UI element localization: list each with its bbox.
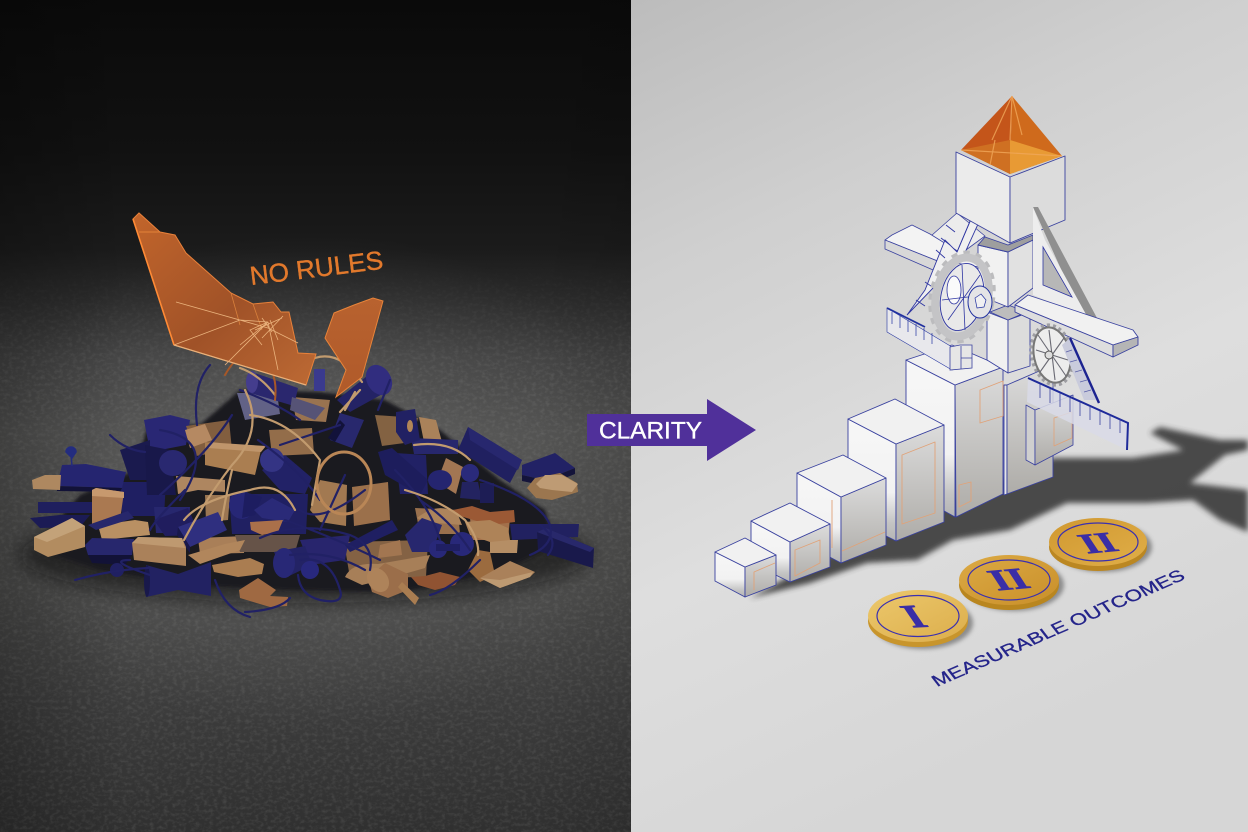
- coin II: II: [981, 561, 1037, 597]
- wood leaning tile: [437, 458, 463, 494]
- illustration: chaotic pile of pieces: [30, 353, 594, 617]
- navy bar right centre: [378, 448, 428, 495]
- right crossbar: [1015, 295, 1138, 357]
- small navy tab: [314, 369, 325, 391]
- middle tower cube: [978, 235, 1033, 307]
- wood block centre: [205, 442, 266, 475]
- edge vignette: [0, 0, 631, 832]
- wood upright block left: [92, 488, 124, 527]
- navy and tan cords: [75, 353, 552, 617]
- navy small ball bottom left: [110, 563, 124, 577]
- wood round shape right: [527, 473, 578, 500]
- wood flat lower centre: [212, 558, 264, 577]
- arrow shape: [587, 399, 756, 461]
- wood plank: [188, 540, 245, 564]
- navy flat block right: [522, 453, 575, 486]
- outcome coins: [868, 518, 1152, 649]
- navy bow-tie spool: [144, 562, 211, 597]
- light background: [631, 0, 1248, 832]
- panel: no rules (dark side): [0, 0, 631, 832]
- navy wedge centre left: [154, 508, 200, 536]
- left stepped set square: [907, 186, 989, 315]
- upper crossbar left: [885, 213, 985, 273]
- navy short column: [405, 518, 442, 552]
- wood tan left: [32, 475, 61, 490]
- pile contact shadow: [20, 507, 590, 603]
- bar 4: [848, 399, 944, 541]
- top tower cube: [956, 152, 1065, 243]
- navy set square edge: [1062, 338, 1099, 403]
- large shard: [133, 213, 316, 385]
- back navy cylinder left: [246, 371, 298, 406]
- coin II: [959, 555, 1064, 611]
- navy pawn: [460, 464, 494, 503]
- bar 5: [906, 345, 1003, 517]
- coin I: [868, 590, 973, 649]
- navy pin: [66, 447, 76, 466]
- front translucent ruler: [1027, 378, 1128, 450]
- navy ball mid right: [428, 470, 452, 490]
- wood block lower left: [132, 537, 186, 566]
- navy cylinder lower: [229, 491, 262, 519]
- wood house piece: [480, 561, 535, 588]
- lower tower cube: [987, 305, 1030, 373]
- navy flat block left: [57, 464, 126, 492]
- pile dark base: [45, 390, 555, 592]
- back navy cylinder right: [337, 360, 397, 412]
- orange glass pyramid: [961, 96, 1062, 174]
- cracked orange acrylic shards: [133, 213, 383, 397]
- tall bars: [906, 345, 1053, 517]
- cast shadow: [750, 427, 1248, 598]
- wood twin blocks: [310, 480, 390, 526]
- hanging small box: [1026, 395, 1073, 465]
- navy chip lower: [254, 498, 295, 522]
- wood cylinder lower left: [98, 520, 150, 540]
- step bars: [715, 399, 944, 597]
- filler pieces behind: [119, 393, 579, 578]
- arrow: clarity: [587, 399, 756, 461]
- wood peg bottom: [362, 563, 419, 605]
- rubber band loop: [317, 452, 371, 514]
- coin III: II: [1072, 527, 1125, 560]
- panel: clarity (light side): [631, 0, 1248, 832]
- navy wedge left: [88, 511, 134, 530]
- navy tag: [396, 409, 420, 445]
- bar 1: [715, 538, 776, 597]
- arrow label: CLARITY: [599, 418, 702, 444]
- spotlight glow: [0, 0, 631, 832]
- dark floor background: [0, 0, 631, 832]
- crack lines: [174, 302, 298, 370]
- wood centre flat: [378, 540, 402, 558]
- navy small bar left: [38, 502, 92, 513]
- concrete floor texture: [0, 323, 631, 832]
- wood grey piece top: [290, 397, 325, 420]
- wood arc right: [417, 508, 462, 525]
- bar 6: [1004, 365, 1053, 495]
- small shard: [325, 298, 383, 397]
- navy bar lower right: [345, 520, 398, 552]
- navy book block: [177, 512, 227, 553]
- label: no rules: NO RULES: [248, 245, 385, 291]
- wood flat centre left: [176, 476, 225, 494]
- navy upright plate: [145, 445, 176, 495]
- terracotta chip lower: [250, 520, 283, 535]
- coin III: [1049, 518, 1152, 572]
- navy cylinder centre: [260, 448, 312, 494]
- terracotta small piece: [411, 572, 460, 590]
- navy block far right: [537, 528, 594, 568]
- navy roller lower centre: [273, 546, 319, 579]
- wood disc lower right: [345, 555, 430, 585]
- right set square: [1033, 207, 1097, 318]
- navy tag centre: [328, 413, 364, 448]
- left ruler: [887, 308, 952, 370]
- navy plate lower left: [85, 538, 134, 565]
- small block on bar 5: [950, 345, 972, 370]
- bar 3: [797, 455, 886, 563]
- navy cords: [75, 365, 552, 617]
- left large gear: [924, 248, 1000, 346]
- label: measurable outcomes: MEASURABLE OUTCOMES: [927, 566, 1189, 690]
- bar 2: [751, 503, 830, 582]
- tower structure: [885, 96, 1138, 465]
- back wood pieces: [185, 424, 212, 448]
- wood turned peg right: [468, 550, 495, 582]
- terracotta pieces right: [453, 506, 515, 525]
- navy block right large: [458, 427, 522, 483]
- right small gear: [1026, 321, 1078, 389]
- terracotta arc over shard: [225, 353, 276, 400]
- wood small key piece: [239, 578, 288, 607]
- wood stacked right: [465, 520, 510, 542]
- navy dumbbell: [429, 532, 474, 558]
- tan cords: [184, 356, 478, 555]
- navy ball: [159, 450, 187, 476]
- wood block far left: [34, 518, 85, 557]
- coin I: I: [894, 599, 935, 635]
